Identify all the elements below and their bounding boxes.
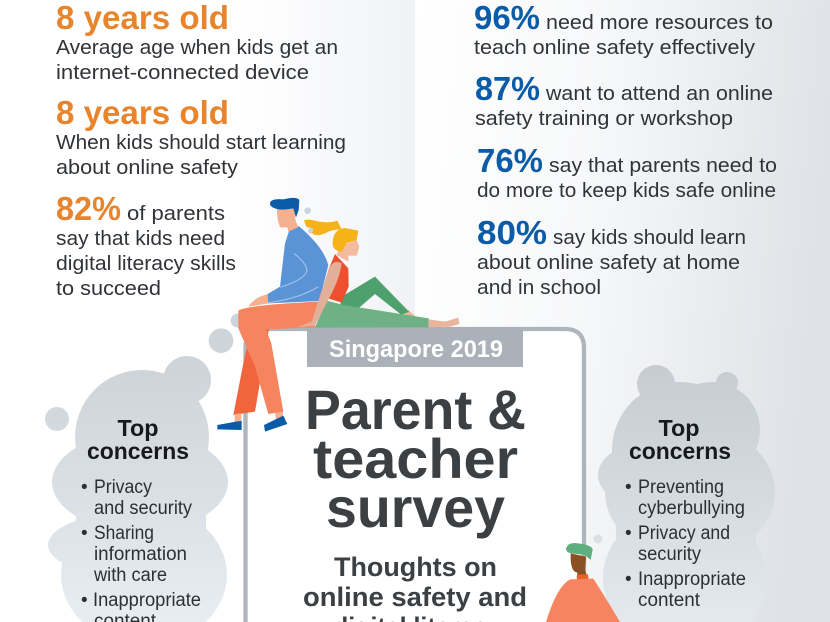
panel: left top concerns cloud bbox=[45, 356, 228, 622]
stat: 80 percent bbox=[477, 214, 746, 299]
title: survey bbox=[326, 476, 505, 539]
stat: 80 percent: about online safety at home bbox=[477, 251, 740, 274]
phone outline bbox=[246, 329, 584, 622]
stat: 80 percent: 80% bbox=[477, 214, 547, 251]
list right: Preventing bbox=[638, 477, 724, 498]
stat: 82 percent: of parents bbox=[127, 202, 225, 225]
stat: 96 percent: 96% bbox=[474, 0, 540, 36]
list right: • bbox=[625, 477, 632, 498]
stat: 76 percent bbox=[477, 142, 777, 202]
stat: 87 percent: safety training or workshop bbox=[475, 107, 733, 130]
list right: content bbox=[638, 590, 701, 611]
stat: learning age bbox=[56, 94, 346, 179]
list left: Sharing bbox=[94, 523, 154, 544]
heading right: concerns bbox=[629, 438, 731, 464]
man bbox=[217, 198, 328, 432]
list left: with care bbox=[93, 565, 167, 586]
illustration: man and girl sitting on phone bbox=[217, 198, 459, 432]
stat: learning age: about online safety bbox=[56, 156, 239, 179]
decorative bubbles near figures bbox=[209, 207, 314, 353]
stat: 82 percent bbox=[56, 190, 236, 300]
stat: 96 percent: need more resources to bbox=[546, 11, 773, 34]
cloud shape right bbox=[594, 365, 775, 622]
list right: security bbox=[638, 544, 701, 565]
stat: 87 percent bbox=[475, 70, 773, 130]
collar bbox=[577, 574, 589, 580]
body bbox=[546, 579, 620, 622]
stat: device age: 8 years old bbox=[56, 0, 229, 36]
list left: and security bbox=[94, 498, 192, 519]
list left: • bbox=[81, 590, 88, 611]
list right: Privacy and bbox=[638, 523, 730, 544]
head wrap bbox=[566, 543, 593, 560]
stat: 76 percent: say that parents need to bbox=[549, 154, 777, 177]
stat: 82 percent: 82% bbox=[56, 190, 121, 227]
heading left bbox=[87, 415, 189, 464]
title: teacher bbox=[313, 427, 518, 490]
cloud shape left bbox=[45, 356, 228, 622]
title: Parent & bbox=[305, 378, 526, 441]
stat: 87 percent: want to attend an online bbox=[545, 82, 773, 105]
list left: • bbox=[81, 523, 88, 544]
list right: • bbox=[625, 523, 632, 544]
face bbox=[571, 553, 587, 577]
stat: device age: Average age when kids get an bbox=[56, 36, 338, 59]
subtitle: Thoughts on bbox=[334, 552, 497, 582]
stat: 82 percent: say that kids need bbox=[56, 227, 225, 250]
stat: 80 percent: and in school bbox=[477, 276, 601, 299]
title bbox=[305, 378, 526, 539]
subtitle: online safety and bbox=[303, 582, 527, 612]
stat: 82 percent: digital literacy skills bbox=[56, 252, 236, 275]
stat: 76 percent: 76% bbox=[477, 142, 543, 179]
subtitle bbox=[303, 552, 527, 622]
list right: cyberbullying bbox=[638, 498, 745, 519]
label: Singapore 2019 bbox=[307, 327, 523, 367]
stat: 76 percent: do more to keep kids safe online bbox=[477, 179, 776, 202]
stat: device age bbox=[56, 0, 338, 84]
panel: teachers statistics bbox=[474, 0, 777, 299]
heading left: Top bbox=[118, 415, 158, 441]
list right: • bbox=[625, 569, 632, 590]
stat: device age: internet-connected device bbox=[56, 61, 309, 84]
stat: 96 percent: teach online safety effectively bbox=[474, 36, 756, 59]
stat: learning age: When kids should start learning bbox=[56, 131, 346, 154]
list left: information bbox=[94, 544, 187, 565]
list right: Inappropriate bbox=[638, 569, 746, 590]
list left: Privacy bbox=[94, 477, 152, 498]
stat: learning age: 8 years old bbox=[56, 94, 229, 131]
heading left: concerns bbox=[87, 438, 189, 464]
stat: 87 percent: 87% bbox=[475, 70, 540, 107]
list right bbox=[625, 477, 746, 611]
list left: • bbox=[81, 477, 88, 498]
stat: 82 percent: to succeed bbox=[56, 277, 161, 300]
stat: 96 percent bbox=[474, 0, 773, 59]
heading right bbox=[629, 415, 731, 464]
panel: phone frame bbox=[246, 327, 584, 622]
girl bbox=[297, 220, 459, 328]
illustration: woman at bottom right bbox=[546, 543, 620, 622]
panel: right top concerns cloud bbox=[594, 365, 775, 622]
panel: parents statistics bbox=[56, 0, 346, 300]
stat: 80 percent: say kids should learn bbox=[553, 226, 746, 249]
heading right: Top bbox=[658, 415, 700, 441]
label: Singapore 2019: Singapore 2019 bbox=[329, 336, 503, 363]
list left: Inappropriate bbox=[93, 590, 201, 611]
list left bbox=[81, 477, 201, 622]
